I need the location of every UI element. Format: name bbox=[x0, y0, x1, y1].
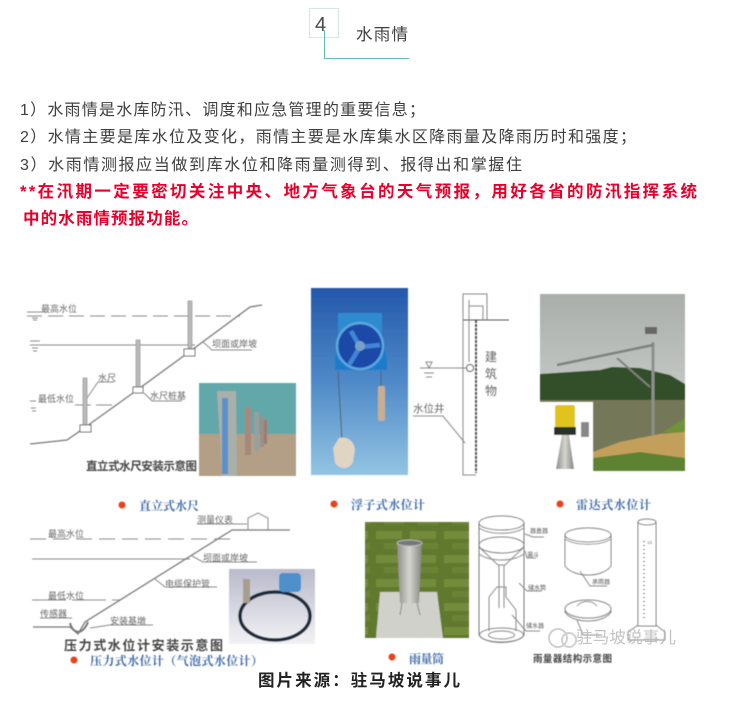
caption: rain gauge: 雨量筒 bbox=[409, 650, 444, 667]
photo: rain gauge bbox=[365, 522, 469, 638]
well diagram: 水位井 bbox=[413, 402, 444, 415]
staff gauge diagram: 直立式水尺安装示意图 bbox=[86, 459, 197, 473]
callout: red warning: **在汛期一定要密切关注中央、地方气象台的天气预报，用好各省的防汛指挥系统 bbox=[20, 181, 698, 201]
staff gauge diagram: 坝面或岸坡 bbox=[212, 338, 257, 349]
caption: staff gauge: 直立式水尺 bbox=[139, 497, 199, 514]
rain gauge structure diagram: 器盖器 bbox=[530, 527, 548, 535]
staff gauge diagram: 最高水位 bbox=[41, 303, 77, 314]
panel: pressure gauge bbox=[30, 513, 315, 669]
pressure gauge diagram: 测量仪表 bbox=[197, 514, 233, 525]
pressure gauge diagram: 最高水位 bbox=[48, 528, 84, 539]
pressure gauge diagram: 最低水位 bbox=[48, 590, 84, 601]
panel: rain gauge bbox=[365, 516, 665, 667]
well diagram: 筑 bbox=[485, 366, 497, 381]
well diagram: 建 bbox=[485, 350, 497, 364]
panel: staff gauge bbox=[27, 301, 296, 514]
rain gauge structure diagram: 储水筒 bbox=[528, 584, 546, 592]
rain gauge structure diagram: 漏斗 bbox=[527, 551, 539, 559]
well diagram bbox=[413, 294, 509, 475]
photo: radar gauge on pole bbox=[540, 294, 685, 471]
text block: key points bbox=[20, 100, 636, 174]
rain gauge structure diagram: 储水器 bbox=[526, 622, 544, 630]
pressure gauge diagram: 安装基墩 bbox=[110, 615, 146, 626]
rain gauge structure diagram: 承雨器 bbox=[592, 578, 610, 586]
panel: float gauge bbox=[311, 288, 509, 513]
image source caption: 图片来源：驻马坡说事儿 bbox=[258, 671, 460, 690]
caption: pressure gauge: 压力式水位计（气泡式水位计） bbox=[90, 652, 263, 669]
rain gauge structure diagram bbox=[479, 516, 665, 665]
staff gauge diagram: 水尺 bbox=[98, 372, 116, 383]
well diagram: 物 bbox=[485, 384, 497, 398]
staff gauge diagram: 最低水位 bbox=[38, 393, 74, 404]
photo: pressure sensor bbox=[229, 569, 315, 644]
photo: float gauge device bbox=[311, 288, 408, 475]
panel: radar gauge bbox=[540, 294, 685, 513]
staff gauge diagram bbox=[27, 301, 262, 473]
callout: red warning bbox=[20, 181, 698, 228]
caption: rain gauge bbox=[388, 650, 444, 667]
text block: key points: 2）水情主要是库水位及变化，雨情主要是水库集水区降雨量及降雨历时和强度； bbox=[20, 128, 636, 146]
photo: staff gauges at reservoir bbox=[199, 383, 296, 476]
pressure gauge diagram: 电缆保护管 bbox=[165, 578, 210, 589]
section heading bbox=[310, 8, 409, 58]
pressure gauge diagram bbox=[30, 513, 290, 653]
pressure gauge diagram: 压力式水位计安装示意图 bbox=[64, 638, 223, 653]
section number box: 4 bbox=[315, 14, 326, 36]
watermark: 驻马坡说事儿 bbox=[576, 628, 676, 647]
staff gauge diagram: 水尺桩基 bbox=[150, 390, 186, 401]
rain gauge structure diagram: 10 bbox=[647, 540, 653, 545]
caption: float gauge: 浮子式水位计 bbox=[351, 496, 425, 513]
heading text: 水雨情 bbox=[356, 25, 408, 44]
text block: key points: 1）水雨情是水库防汛、调度和应急管理的重要信息； bbox=[20, 100, 425, 119]
caption: radar gauge: 雷达式水位计 bbox=[576, 496, 651, 513]
callout: red warning: 中的水雨情预报功能。 bbox=[23, 209, 198, 228]
rain gauge structure diagram: 雨量器结构示意图 bbox=[533, 653, 612, 665]
pressure gauge diagram: 坝面或岸坡 bbox=[203, 552, 248, 563]
text block: key points: 3）水雨情测报应当做到库水位和降雨量测得到、报得出和掌握住 bbox=[20, 155, 522, 174]
heading underline bbox=[324, 30, 409, 58]
pressure gauge diagram: 传感器 bbox=[40, 608, 67, 619]
